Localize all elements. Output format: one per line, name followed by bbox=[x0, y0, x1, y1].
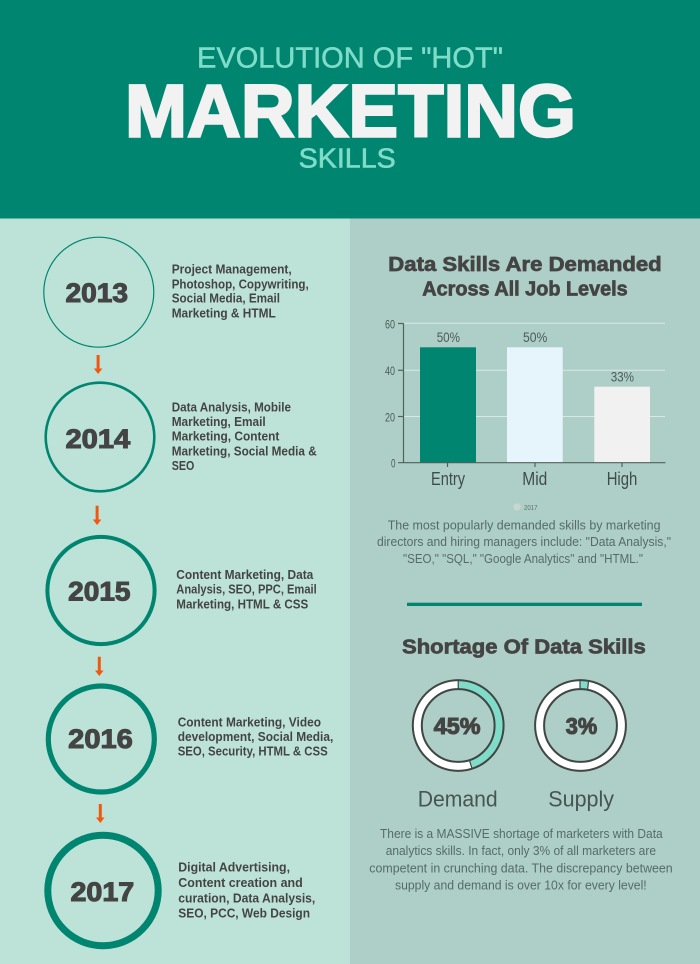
paragraph: most demanded skills: directors and hiring managers include: "Data Analysis," bbox=[377, 534, 671, 549]
arrow 2016 to 2017 bbox=[96, 804, 105, 823]
x axis labels: Entry bbox=[431, 469, 465, 489]
skills 2013 bbox=[172, 262, 309, 320]
skills 2014: SEO bbox=[172, 459, 195, 473]
bar: mid bbox=[507, 347, 563, 463]
timeline: 2015 bbox=[47, 537, 317, 644]
skills 2016: Content Marketing, Video bbox=[178, 715, 321, 729]
value labels bbox=[437, 330, 634, 385]
paragraph: shortage explanation bbox=[369, 826, 673, 892]
timeline: 2015: 2015 bbox=[68, 576, 130, 606]
bar: high bbox=[594, 387, 650, 463]
skills 2013: Marketing & HTML bbox=[172, 306, 276, 320]
x axis labels: High bbox=[607, 469, 637, 489]
paragraph: most demanded skills: "SEO," "SQL," "Google Analytics" and "HTML." bbox=[403, 551, 643, 566]
title line: evolution of hot: EVOLUTION OF "HOT" bbox=[197, 43, 503, 75]
x axis labels bbox=[431, 469, 637, 489]
timeline: 2014 bbox=[46, 383, 317, 491]
skills 2017: curation, Data Analysis, bbox=[178, 891, 315, 905]
skills 2017: Digital Advertising, bbox=[178, 861, 290, 875]
value labels: 50% bbox=[523, 330, 547, 345]
skills 2016: SEO, Security, HTML & CSS bbox=[178, 745, 328, 759]
legend bbox=[513, 503, 538, 512]
title line: skills: SKILLS bbox=[299, 143, 396, 174]
skills 2013: Social Media, Email bbox=[172, 292, 280, 306]
arrow 2014 to 2015 bbox=[93, 506, 101, 525]
heading: data skills demanded: Data Skills Are Demanded bbox=[388, 254, 662, 276]
paragraph: shortage explanation: competent in crunching data. The discrepancy between bbox=[369, 860, 673, 875]
y axis labels: 60 bbox=[385, 318, 395, 332]
paragraph: shortage explanation: analytics skills. In fact, only 3% of all marketers are bbox=[386, 843, 656, 858]
timeline: 2017 bbox=[48, 835, 315, 946]
skills 2014: Data Analysis, Mobile bbox=[172, 400, 291, 414]
skills 2017: Content creation and bbox=[178, 876, 303, 890]
label: demand: Demand bbox=[418, 787, 498, 812]
skills 2014: Marketing, Social Media & bbox=[172, 445, 317, 459]
skills 2015 bbox=[176, 568, 317, 611]
paragraph: most demanded skills: The most popularly demanded skills by marketing bbox=[388, 517, 660, 532]
value labels: 33% bbox=[611, 370, 634, 385]
header banner bbox=[0, 0, 700, 218]
heading: data skills demanded: Across All Job Levels bbox=[422, 279, 628, 301]
skills 2015: Marketing, HTML & CSS bbox=[176, 597, 308, 611]
donut: supply 3%: 3% bbox=[566, 713, 597, 739]
timeline: 2017: 2017 bbox=[70, 877, 134, 907]
skills 2013: Photoshop, Copywriting, bbox=[172, 277, 309, 291]
skills 2014: Marketing, Email bbox=[172, 415, 266, 429]
skills 2017 bbox=[178, 861, 315, 921]
donut: supply 3% bbox=[535, 680, 626, 771]
skills 2014: Marketing, Content bbox=[172, 430, 280, 444]
donut: demand 45%: 45% bbox=[434, 713, 480, 739]
y axis labels: 0 bbox=[391, 456, 396, 470]
timeline: 2013: 2013 bbox=[66, 278, 128, 308]
bar chart bbox=[385, 318, 666, 512]
timeline: 2016 bbox=[48, 686, 333, 792]
right panel background bbox=[350, 218, 700, 964]
y axis labels: 40 bbox=[385, 364, 395, 378]
legend: 2017 bbox=[524, 505, 538, 512]
skills 2015: Content Marketing, Data bbox=[176, 568, 314, 582]
timeline: 2014: 2014 bbox=[66, 424, 130, 454]
bar: entry bbox=[420, 347, 476, 463]
paragraph: shortage explanation: There is a MASSIVE shortage of marketers with Data bbox=[380, 826, 663, 841]
arrow 2015 to 2016 bbox=[95, 657, 104, 676]
y axis labels: 20 bbox=[385, 410, 395, 424]
timeline: 2013 bbox=[44, 237, 309, 347]
heading: data skills demanded bbox=[388, 254, 662, 301]
skills 2013: Project Management, bbox=[172, 262, 292, 276]
skills 2015: Analysis, SEO, PPC, Email bbox=[176, 582, 317, 596]
value labels: 50% bbox=[437, 330, 460, 345]
timeline: 2016: 2016 bbox=[68, 724, 133, 754]
title line: marketing: MARKETING bbox=[125, 70, 576, 153]
label: supply: Supply bbox=[548, 787, 614, 812]
paragraph: shortage explanation: supply and demand is over 10x for every level! bbox=[395, 877, 647, 892]
left panel background bbox=[0, 218, 350, 964]
skills 2016 bbox=[178, 715, 333, 759]
paragraph: most demanded skills bbox=[377, 517, 671, 566]
x axis labels: Mid bbox=[522, 469, 547, 489]
y axis labels bbox=[385, 318, 396, 470]
heading: shortage of data skills: Shortage Of Data Skills bbox=[402, 636, 646, 658]
skills 2017: SEO, PCC, Web Design bbox=[178, 907, 310, 921]
arrow 2013 to 2014 bbox=[94, 355, 102, 374]
donut: demand 45% bbox=[413, 680, 504, 771]
skills 2016: development, Social Media, bbox=[178, 730, 333, 744]
skills 2014 bbox=[172, 400, 317, 473]
